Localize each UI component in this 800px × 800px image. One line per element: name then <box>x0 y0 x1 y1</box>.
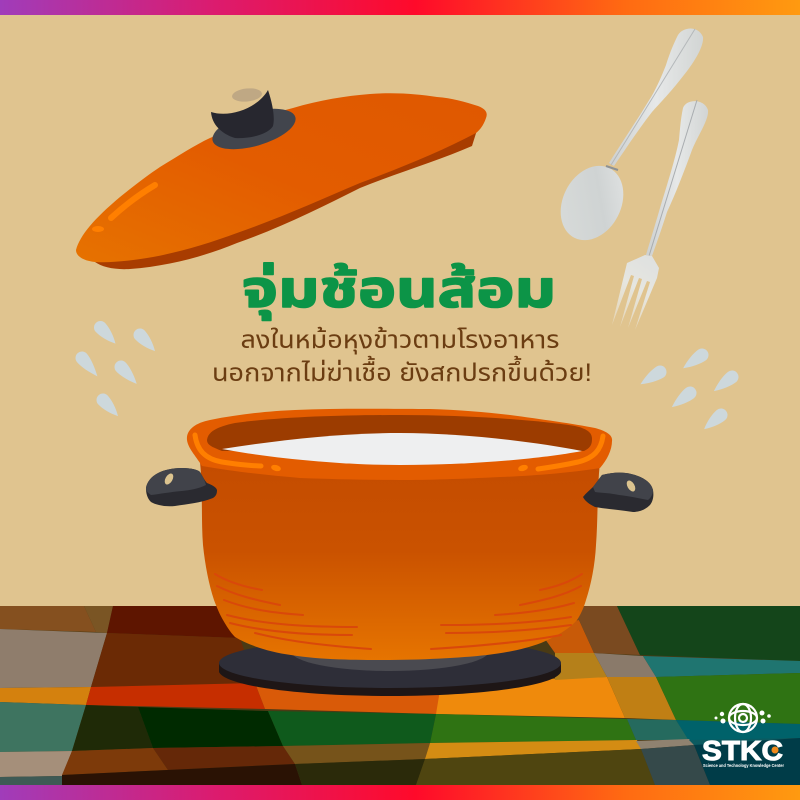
rim spot left <box>270 464 282 472</box>
top gradient bar <box>0 0 800 15</box>
STKC logo <box>702 704 784 768</box>
rim highlight left <box>195 435 261 466</box>
left handle <box>146 468 217 506</box>
plate top <box>219 638 561 688</box>
subtitle line 2: นอกจากไม่ฆ่าเชื้อ ยังสกปรกขึ้นด้วย! <box>212 355 592 387</box>
logo wordmark: STKC <box>702 735 783 766</box>
rim spot right <box>517 464 529 472</box>
logo atom icon <box>729 704 757 732</box>
fork handle <box>646 101 708 256</box>
lid <box>76 87 487 269</box>
spoon bowl <box>548 155 636 251</box>
plate inner <box>291 631 489 671</box>
pot <box>187 409 612 660</box>
lid knob base <box>208 101 300 157</box>
lid highlight <box>111 185 155 218</box>
lid knob top <box>231 87 263 103</box>
logo orange dot <box>772 746 778 754</box>
fork head <box>612 255 659 330</box>
lid underside <box>95 130 477 269</box>
water drops left <box>73 318 160 421</box>
bottom gradient bar <box>0 785 800 800</box>
logo tagline: Science and Technology Knowledge Center <box>703 763 784 768</box>
milk surface <box>222 433 582 465</box>
water drops right <box>637 346 741 434</box>
plate <box>219 631 561 696</box>
tablecloth <box>0 606 800 785</box>
logo side dots <box>714 710 771 724</box>
subtitle line 1: ลงในหม้อหุงข้าวตามโรงอาหาร <box>240 326 560 355</box>
lid small highlight <box>92 226 104 232</box>
title: จุ่มช้อนส้อม <box>242 261 556 320</box>
pot body <box>200 462 600 660</box>
plate side <box>219 663 561 696</box>
fork <box>612 100 708 330</box>
pot interior <box>207 415 592 451</box>
lid knob <box>211 90 274 138</box>
pot rim <box>187 409 612 480</box>
rim highlight right <box>538 436 603 469</box>
spoon <box>548 28 703 251</box>
right handle <box>583 473 653 512</box>
pot ribs <box>215 574 582 649</box>
lid top <box>76 93 487 262</box>
spoon handle <box>609 28 703 166</box>
